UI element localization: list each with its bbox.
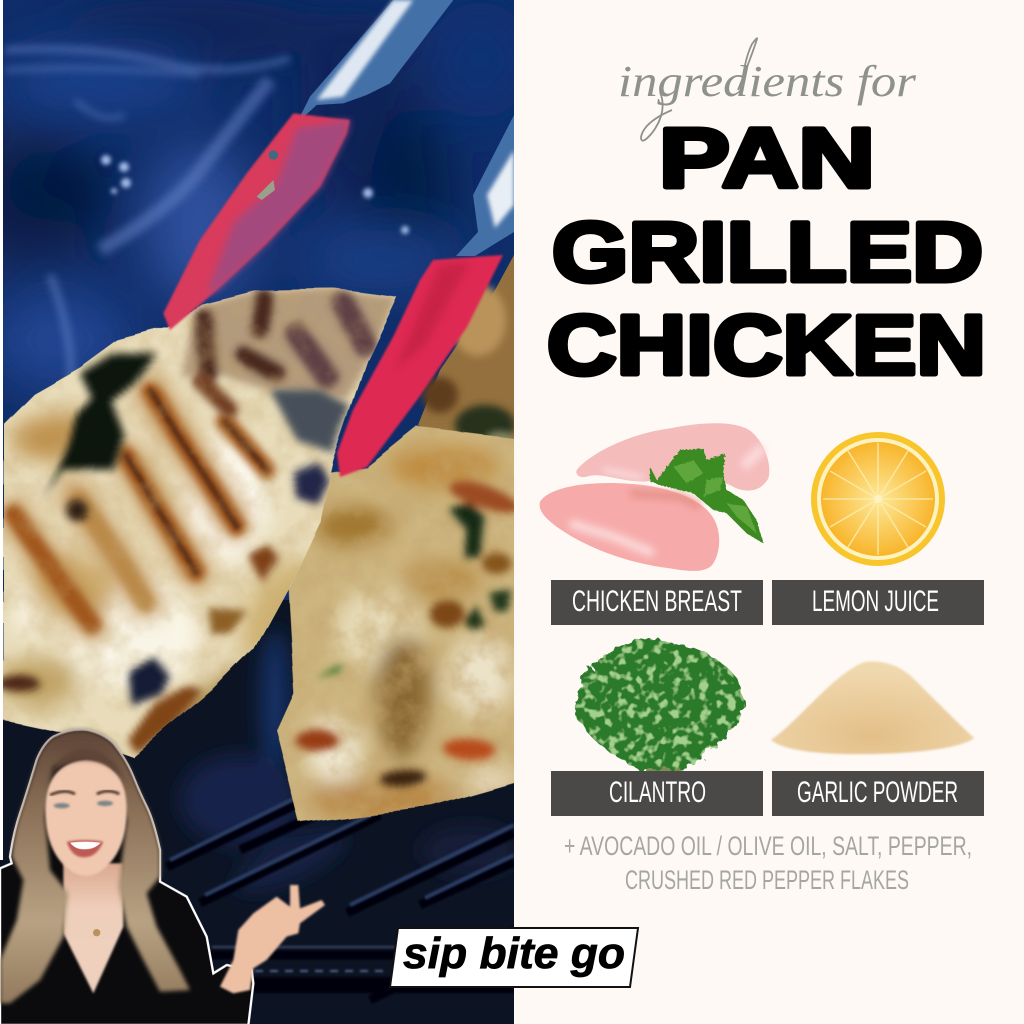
title: PAN GRILLED CHICKEN: CHICKEN [547, 298, 986, 392]
logo: sip bite go: sip bite go [403, 929, 625, 978]
title: PAN GRILLED CHICKEN: PAN [659, 111, 875, 205]
panel: grilled chicken photo [0, 0, 533, 1024]
title: PAN GRILLED CHICKEN: GRILLED [552, 205, 983, 299]
text: additional ingredients [564, 831, 972, 895]
heading: ingredients for [618, 38, 917, 141]
title: PAN GRILLED CHICKEN [547, 111, 986, 392]
label: lemon juice: LEMON JUICE [812, 585, 939, 618]
white left edge [0, 0, 3, 860]
back portion in smoke [180, 288, 397, 400]
face [45, 759, 127, 876]
hand [220, 885, 325, 993]
tongs: left [163, 0, 453, 330]
tongs: right [337, 115, 514, 477]
background: smoke over blue [3, 0, 514, 720]
label: garlic powder [772, 771, 984, 816]
right chicken breast [277, 426, 514, 822]
label: cilantro [551, 771, 763, 816]
left chicken breast [3, 288, 396, 758]
label: cilantro: CILANTRO [609, 776, 706, 809]
icon: cilantro bunch [574, 640, 744, 778]
icon: garlic powder pile [771, 662, 974, 754]
upper right chicken piece [418, 255, 514, 440]
presenter: smiling woman with long hair in black top [0, 730, 325, 1024]
hair [0, 730, 190, 1003]
neck and chest [63, 863, 123, 993]
grill pan ribs [0, 600, 520, 1024]
label: lemon juice [772, 580, 984, 625]
heading: ingredients for: ingredients for [618, 57, 917, 106]
icon: raw chicken breast with herb [540, 423, 769, 571]
label: chicken breast [551, 580, 763, 625]
icon: lemon slice [811, 432, 945, 566]
label: chicken breast: CHICKEN BREAST [572, 585, 742, 618]
